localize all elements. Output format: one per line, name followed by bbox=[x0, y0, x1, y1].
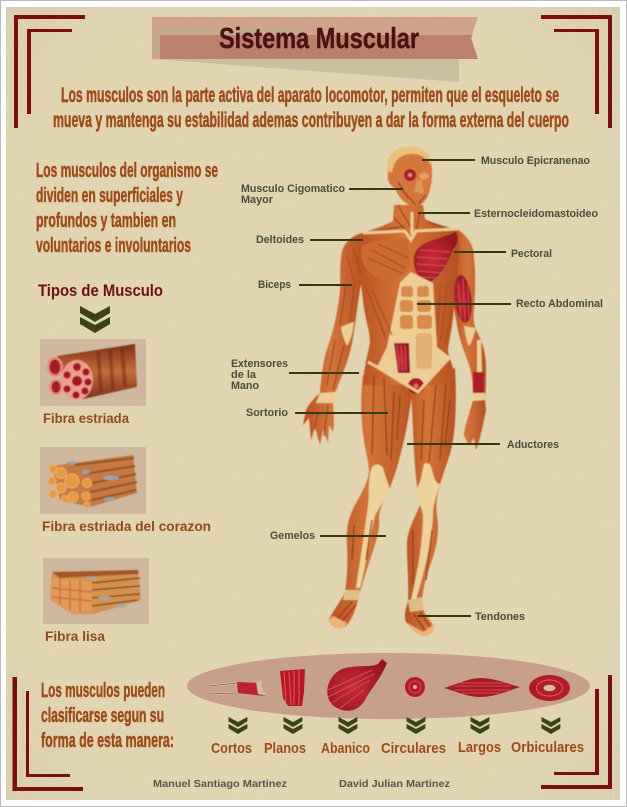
credits bbox=[153, 778, 450, 790]
icon: short muscle bbox=[209, 680, 267, 696]
panel: fibra estriada del corazon bbox=[40, 447, 211, 534]
label: esternocleidomastoideo: Esternocleidomastoideo bbox=[474, 208, 598, 220]
left arm bbox=[303, 233, 364, 445]
title banner bbox=[152, 17, 478, 82]
icon: orbicular muscle bbox=[529, 675, 570, 701]
left leg bbox=[329, 375, 418, 628]
icon: smooth muscle bundle bbox=[50, 570, 141, 614]
pectoral red muscle bbox=[414, 232, 458, 282]
intro text bbox=[53, 84, 569, 132]
icon: cardiac muscle bundle bbox=[48, 455, 137, 508]
panel: fibra lisa bbox=[43, 558, 149, 644]
label: sortorio: Sortorio bbox=[246, 407, 288, 419]
text: clasificacion bbox=[41, 680, 174, 752]
calf detail bbox=[352, 520, 432, 585]
corner bracket: top left bbox=[14, 15, 85, 128]
label: pectoral: Pectoral bbox=[511, 248, 552, 260]
pectoral left bbox=[361, 238, 410, 281]
left text block: Los musculos del organismo se bbox=[36, 160, 218, 182]
left text block: dividen en superficiales y bbox=[36, 185, 184, 207]
arm muscle striations bbox=[314, 285, 354, 436]
muscle shape labels: Circulares bbox=[381, 740, 446, 757]
icon: long muscle bbox=[444, 678, 520, 697]
label: gemelos bbox=[270, 530, 386, 542]
title: Sistema Muscular bbox=[219, 23, 419, 55]
corner bracket: bottom left bbox=[12, 677, 83, 791]
ankles and feet bbox=[329, 590, 434, 636]
credits: Manuel Santiago Martinez bbox=[153, 778, 287, 790]
label: extensores de la mano bbox=[231, 358, 359, 392]
text: clasificacion: clasificarse segun su bbox=[41, 705, 164, 727]
icon: circular muscle bbox=[405, 677, 425, 697]
right arm bbox=[452, 229, 486, 450]
muscle shape labels: Abanico bbox=[321, 740, 370, 757]
neck and shoulders detail bbox=[373, 205, 455, 232]
left text block: profundos y tambien en bbox=[36, 210, 176, 232]
anatomical labels bbox=[231, 155, 603, 623]
corner bracket: bottom right bbox=[541, 675, 612, 789]
label: musculo cigomatico mayor bbox=[241, 183, 403, 206]
icon: striated muscle bundle bbox=[47, 344, 137, 400]
sphincter red muscle bbox=[408, 378, 424, 394]
torso bbox=[357, 205, 459, 385]
muscle shape labels: Planos bbox=[264, 740, 306, 757]
label: extensores de la mano: de la bbox=[231, 369, 257, 381]
muscle shape labels bbox=[211, 739, 584, 757]
label: aductores: Aductores bbox=[507, 439, 559, 451]
chevrons row bbox=[228, 717, 560, 734]
label: musculo cigomatico mayor: Mayor bbox=[241, 194, 274, 206]
icon: fan muscle bbox=[327, 659, 387, 711]
panel: muscle shapes oval bbox=[187, 653, 590, 719]
heading: tipos de musculo: Tipos de Musculo bbox=[38, 281, 163, 300]
abdomen bbox=[377, 272, 450, 392]
label: extensores de la mano: Mano bbox=[231, 380, 259, 392]
text: clasificacion: Los musculos pueden bbox=[41, 680, 165, 702]
tendons: arms bbox=[316, 322, 485, 403]
label: musculo cigomatico mayor: Musculo Cigomatico bbox=[241, 183, 345, 195]
left text block bbox=[36, 160, 218, 257]
muscle shape labels: Cortos bbox=[211, 740, 252, 757]
facial muscle bbox=[404, 169, 416, 181]
right leg bbox=[405, 368, 456, 636]
corner bracket: top right bbox=[541, 15, 612, 128]
label: deltoides: Deltoides bbox=[256, 234, 304, 246]
muscle shape labels: Largos bbox=[458, 739, 501, 756]
inguinal cream band bbox=[368, 357, 450, 392]
label: Fibra lisa bbox=[45, 628, 105, 644]
thigh muscle striations bbox=[372, 375, 450, 462]
head bbox=[388, 147, 432, 207]
label: tendones: Tendones bbox=[475, 611, 525, 623]
biceps red muscle bbox=[452, 274, 474, 324]
icon: double chevron down bbox=[80, 306, 110, 333]
label: deltoides bbox=[256, 234, 363, 246]
icon: flat muscle bbox=[280, 669, 305, 706]
knee tendons bbox=[356, 463, 440, 600]
label: gemelos: Gemelos bbox=[270, 530, 315, 542]
label: extensores de la mano: Extensores bbox=[231, 358, 288, 370]
label: Fibra estriada del corazon bbox=[42, 518, 211, 534]
human muscular figure bbox=[303, 147, 486, 636]
label: recto abdominal: Recto Abdominal bbox=[516, 298, 603, 310]
text: clasificacion: forma de esta manera: bbox=[41, 730, 174, 752]
panel: fibra estriada bbox=[40, 339, 146, 426]
left text block: voluntarios e involuntarios bbox=[36, 235, 191, 257]
forearm red muscle bbox=[473, 372, 484, 393]
credits: David Julian Martinez bbox=[339, 778, 450, 790]
label: Fibra estriada bbox=[43, 410, 129, 426]
label: biceps bbox=[258, 279, 352, 291]
side obliques bbox=[365, 285, 452, 345]
label: pectoral bbox=[454, 248, 552, 260]
label: tendones bbox=[418, 611, 525, 623]
rectus red muscle bbox=[394, 343, 410, 373]
muscle shape labels: Orbiculares bbox=[511, 739, 584, 756]
label: biceps: Biceps bbox=[258, 279, 291, 291]
label: musculo epicranenao: Musculo Epicranenao bbox=[481, 155, 590, 167]
